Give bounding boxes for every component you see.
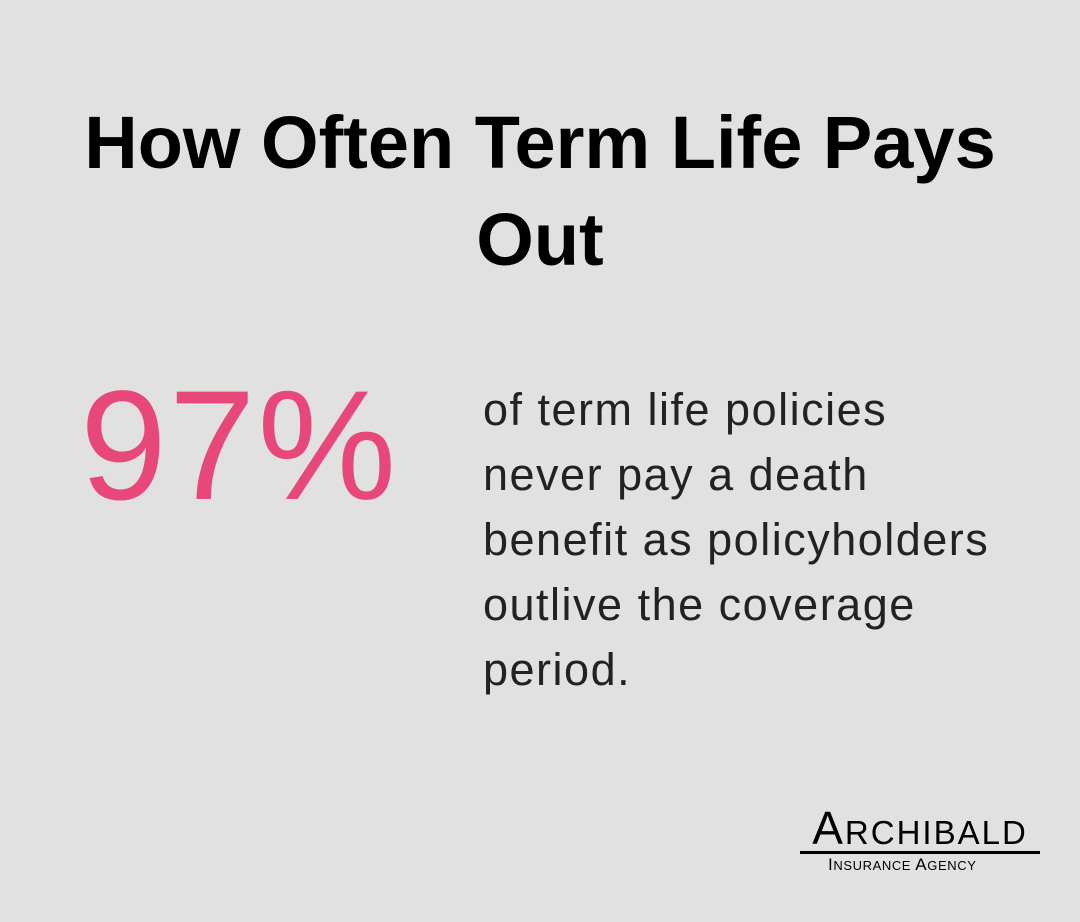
title (84, 101, 996, 281)
description text (483, 384, 989, 695)
description text: benefit as policyholders (483, 514, 989, 565)
description text: never pay a death (483, 449, 869, 500)
logo: ARCHIBALD (812, 802, 1028, 854)
big statistic: 97% (80, 359, 398, 533)
title: Out (476, 198, 604, 281)
description text: outlive the coverage (483, 579, 916, 630)
description text: period. (483, 644, 631, 695)
description text: of term life policies (483, 384, 887, 435)
logo: INSURANCE AGENCY (828, 855, 976, 874)
title: How Often Term Life Pays (84, 101, 996, 184)
logo (800, 802, 1040, 874)
